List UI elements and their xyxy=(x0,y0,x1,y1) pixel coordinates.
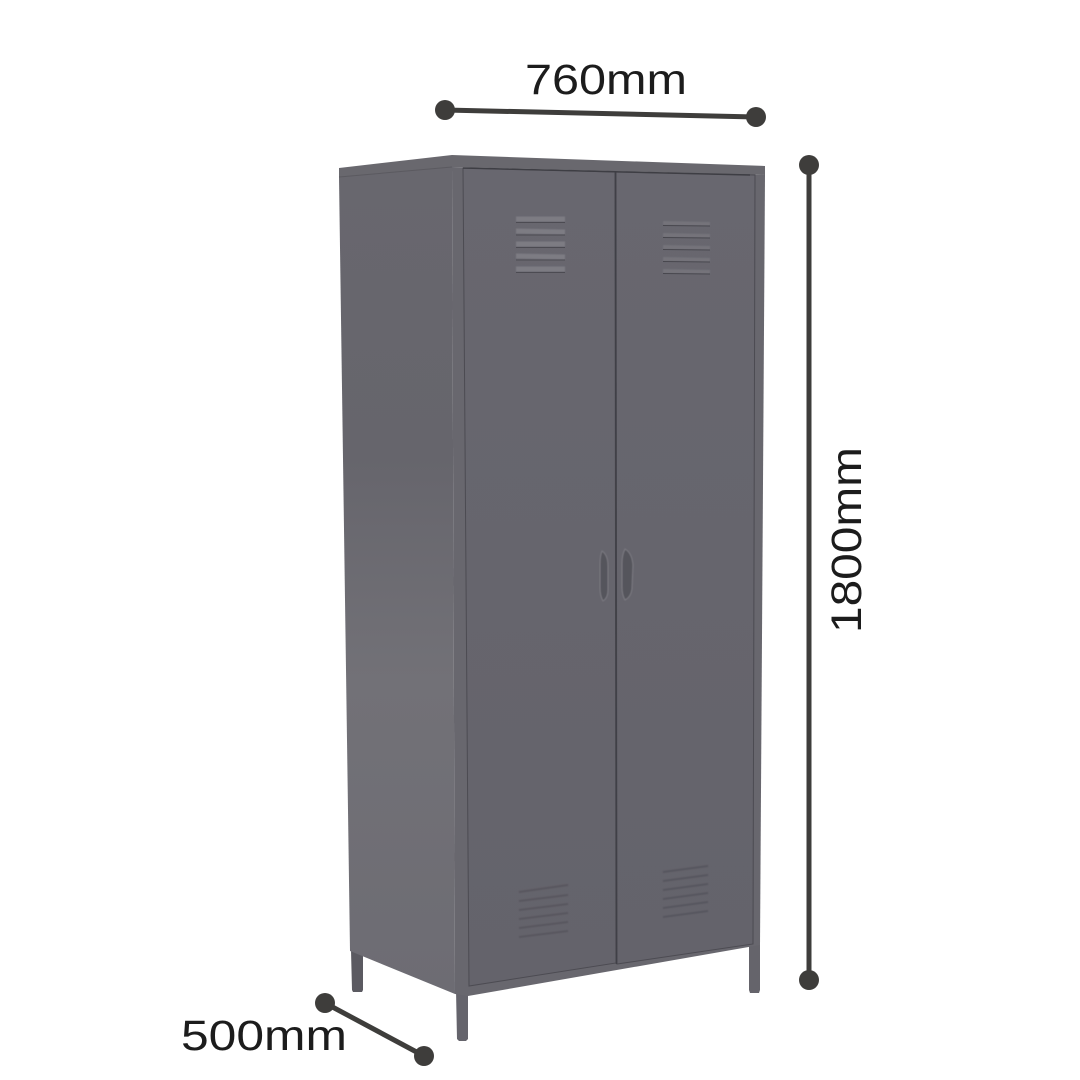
side panel xyxy=(339,167,455,994)
left door xyxy=(463,168,616,986)
upper right vent shadows xyxy=(663,226,710,274)
door gap xyxy=(616,172,617,964)
top edge shadow xyxy=(339,167,452,177)
depth end dot xyxy=(414,1046,434,1066)
left door handle xyxy=(600,551,608,601)
top door shadow xyxy=(463,168,750,175)
back left leg xyxy=(351,950,363,992)
upper left vent shadows xyxy=(516,222,565,272)
depth dimension xyxy=(181,993,434,1066)
locker cabinet xyxy=(339,155,765,1041)
front frame xyxy=(452,167,765,996)
top panel xyxy=(339,155,765,177)
back right leg xyxy=(749,945,760,993)
width label: 760mm xyxy=(525,56,687,104)
depth label: 500mm xyxy=(181,1012,347,1060)
height dimension xyxy=(799,155,871,990)
width end dot xyxy=(746,107,766,127)
width line xyxy=(445,110,756,117)
front leg xyxy=(456,990,468,1041)
upper left vent xyxy=(516,219,565,269)
width start dot xyxy=(435,100,455,120)
right door handle xyxy=(622,549,633,600)
depth line xyxy=(325,1003,424,1056)
lower right vent xyxy=(663,866,708,917)
width dimension xyxy=(435,56,766,127)
height bottom dot xyxy=(799,970,819,990)
upper right vent xyxy=(663,223,710,272)
height top dot xyxy=(799,155,819,175)
lower left vent xyxy=(519,885,568,937)
height line xyxy=(806,165,812,980)
height label: 1800mm xyxy=(823,447,871,633)
right door xyxy=(616,172,755,964)
depth start dot xyxy=(315,993,335,1013)
